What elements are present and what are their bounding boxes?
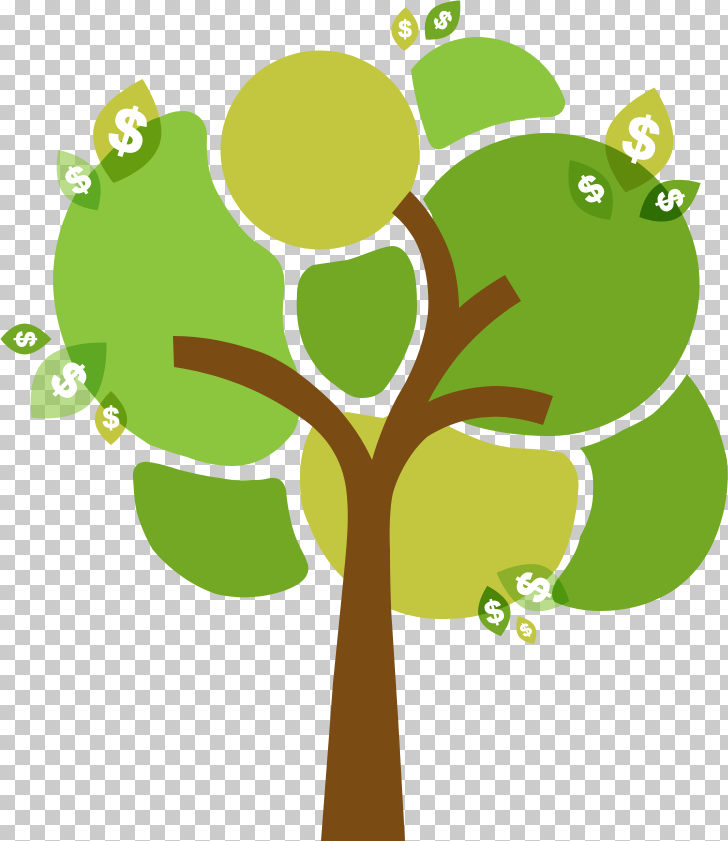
tree crown: left large light green blob	[53, 111, 300, 466]
leaf: translucent top left	[56, 150, 101, 210]
leaf: green overlapping right crown edge: $	[648, 184, 693, 216]
leaf: translucent bottom: $	[504, 563, 562, 611]
leaf: dark green on right crown: $	[571, 167, 612, 213]
leaf: large translucent left: $	[39, 350, 99, 410]
leaf: small olive top: $	[398, 16, 412, 43]
leaf: large translucent left	[30, 342, 106, 418]
leaf: green bottom	[478, 586, 510, 636]
leaf: small green top	[414, 0, 472, 50]
leaf: small green top: $	[428, 4, 459, 36]
leaf: dark green on right crown	[554, 149, 626, 231]
leaf: green bottom: $	[481, 592, 507, 632]
tree trunk and branches	[173, 191, 553, 841]
tree crown: bottom right green blob	[552, 374, 728, 611]
leaf: small olive top	[391, 7, 419, 51]
tree crown: middle green blob	[297, 246, 417, 398]
tree crown: upper right light green blob	[411, 37, 565, 149]
leaf: green far left: $	[10, 331, 41, 347]
tree crown: bottom left green blob	[133, 462, 308, 597]
leaf: large olive top left: $	[101, 93, 155, 170]
tree crown: bottom olive blob	[300, 410, 579, 619]
leaf: tiny olive bottom: $	[517, 619, 535, 641]
leaf: large olive top right	[605, 88, 674, 192]
tree crown: right large green circle	[423, 133, 700, 436]
leaf: small olive left	[94, 391, 128, 445]
leaf: green overlapping right crown edge	[639, 180, 701, 222]
leaf: small olive left: $	[103, 402, 120, 435]
leaf: translucent top left: $	[58, 157, 99, 204]
tree crown: olive circle	[220, 50, 420, 250]
leaf: tiny olive bottom	[510, 611, 542, 649]
leaf: large olive top left	[93, 79, 162, 183]
leaf: large olive top right: $	[615, 102, 667, 176]
leaf: green far left	[1, 324, 52, 354]
